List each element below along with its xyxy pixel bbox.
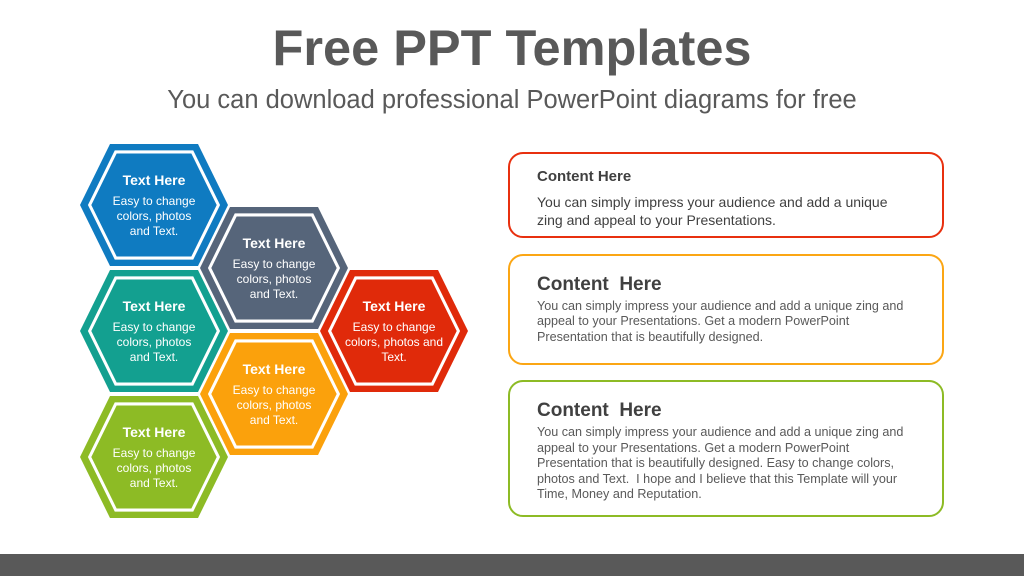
- content box: orange: [508, 254, 944, 365]
- content box: red: [508, 152, 944, 238]
- hexagon: teal: Easy to change: [113, 320, 196, 334]
- hexagon: red: colors, photos and: [345, 335, 443, 349]
- content box: orange: appeal to your Presentations. Get a modern PowerPoint: [537, 314, 849, 328]
- content box: green: photos and Text. I hope and I believe that this Template will your: [537, 472, 897, 486]
- content box: green: appeal to your Presentations. Get a modern PowerPoint: [537, 440, 849, 454]
- hexagon: blue: Text Here: [123, 172, 186, 188]
- content box: green: Presentation that is beautifully designed. Easy to change colors,: [537, 456, 894, 470]
- content box: green: Time, Money and Reputation.: [537, 487, 702, 501]
- footer bar: [0, 554, 1024, 576]
- hexagon: slate: Text Here: [243, 235, 306, 251]
- hexagon: green: colors, photos: [117, 461, 191, 475]
- hexagon: green: [80, 396, 228, 518]
- hexagon: teal: [80, 270, 228, 392]
- hexagon: green: and Text.: [130, 476, 178, 490]
- content box: green: Content Here: [537, 400, 662, 421]
- content box: red: Content Here: [537, 168, 631, 185]
- hexagon: orange: Easy to change: [233, 383, 316, 397]
- content box: red: zing and appeal to your Presentations.: [537, 212, 776, 228]
- content box: orange: Content Here: [537, 274, 662, 295]
- hexagon: slate: and Text.: [250, 287, 298, 301]
- content box: red: You can simply impress your audience and add a unique: [537, 194, 888, 210]
- hexagon: green: Text Here: [123, 424, 186, 440]
- hexagon: red: [320, 270, 468, 392]
- hexagon: red: Text Here: [363, 298, 426, 314]
- content box: green: You can simply impress your audience and add a unique zing and: [537, 425, 903, 439]
- hexagon: red: Text.: [381, 350, 407, 364]
- subtitle: You can download professional PowerPoint diagrams for free: [167, 86, 857, 114]
- hexagon: slate: colors, photos: [237, 272, 311, 286]
- hexagon: red: Easy to change: [353, 320, 436, 334]
- hexagon: orange: [200, 333, 348, 455]
- hexagon: orange: Text Here: [243, 361, 306, 377]
- hexagon: slate: Easy to change: [233, 257, 316, 271]
- title: Free PPT Templates: [272, 19, 752, 76]
- hexagon: green: Easy to change: [113, 446, 196, 460]
- content box: orange: You can simply impress your audience and add a unique zing and: [537, 299, 903, 313]
- hexagon: blue: [80, 144, 228, 266]
- hexagon: orange: and Text.: [250, 413, 298, 427]
- hexagon: blue: Easy to change: [113, 194, 196, 208]
- hexagon: slate: [200, 207, 348, 329]
- hexagon: blue: and Text.: [130, 224, 178, 238]
- hexagon: teal: Text Here: [123, 298, 186, 314]
- content box: orange: Presentation that is beautifully designed.: [537, 330, 763, 344]
- hexagon: teal: colors, photos: [117, 335, 191, 349]
- hexagon: orange: colors, photos: [237, 398, 311, 412]
- hexagon: teal: and Text.: [130, 350, 178, 364]
- content box: green: [508, 380, 944, 517]
- hexagon: blue: colors, photos: [117, 209, 191, 223]
